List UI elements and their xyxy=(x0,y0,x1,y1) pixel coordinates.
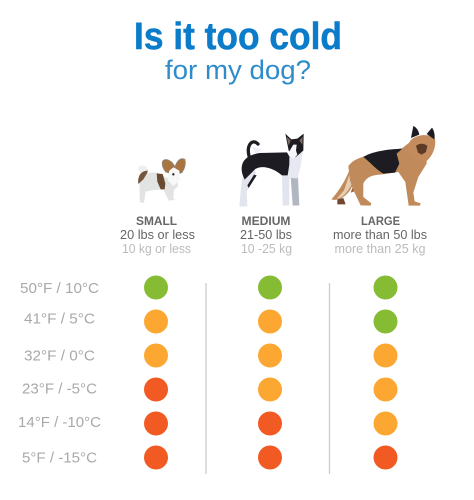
temperature labels: 41°F / 5°C xyxy=(24,310,95,328)
column heading: small xyxy=(120,214,195,256)
temperature labels: 5°F / -15°C xyxy=(22,450,97,466)
icon: large dog xyxy=(331,126,435,206)
title: for my dog? xyxy=(165,55,311,85)
icon: small dog xyxy=(138,159,185,203)
temperature labels: 50°F / 10°C xyxy=(20,280,99,297)
column heading: medium: MEDIUM xyxy=(242,214,290,228)
temperature labels xyxy=(18,280,101,466)
title: Is it too cold xyxy=(134,16,342,58)
column heading: medium: 21-50 lbs xyxy=(240,228,292,242)
rating dots: medium xyxy=(258,276,282,470)
column heading: large: LARGE xyxy=(361,214,400,228)
column heading: small: 20 lbs or less xyxy=(120,228,195,242)
column heading: large xyxy=(333,214,427,256)
temperature labels: 23°F / -5°C xyxy=(22,380,97,398)
rating dots: large xyxy=(374,276,398,470)
title xyxy=(134,16,342,85)
temperature labels: 14°F / -10°C xyxy=(18,414,101,431)
icon: medium dog xyxy=(239,134,304,207)
temperature labels: 32°F / 0°C xyxy=(24,348,95,364)
column heading: small: SMALL xyxy=(136,214,177,228)
column heading: medium xyxy=(240,214,292,256)
rating dots: small xyxy=(144,276,168,470)
column heading: large: more than 25 kg xyxy=(334,242,426,256)
column heading: medium: 10 -25 kg xyxy=(241,242,292,256)
column heading: large: more than 50 lbs xyxy=(333,228,427,242)
column heading: small: 10 kg or less xyxy=(122,242,191,256)
